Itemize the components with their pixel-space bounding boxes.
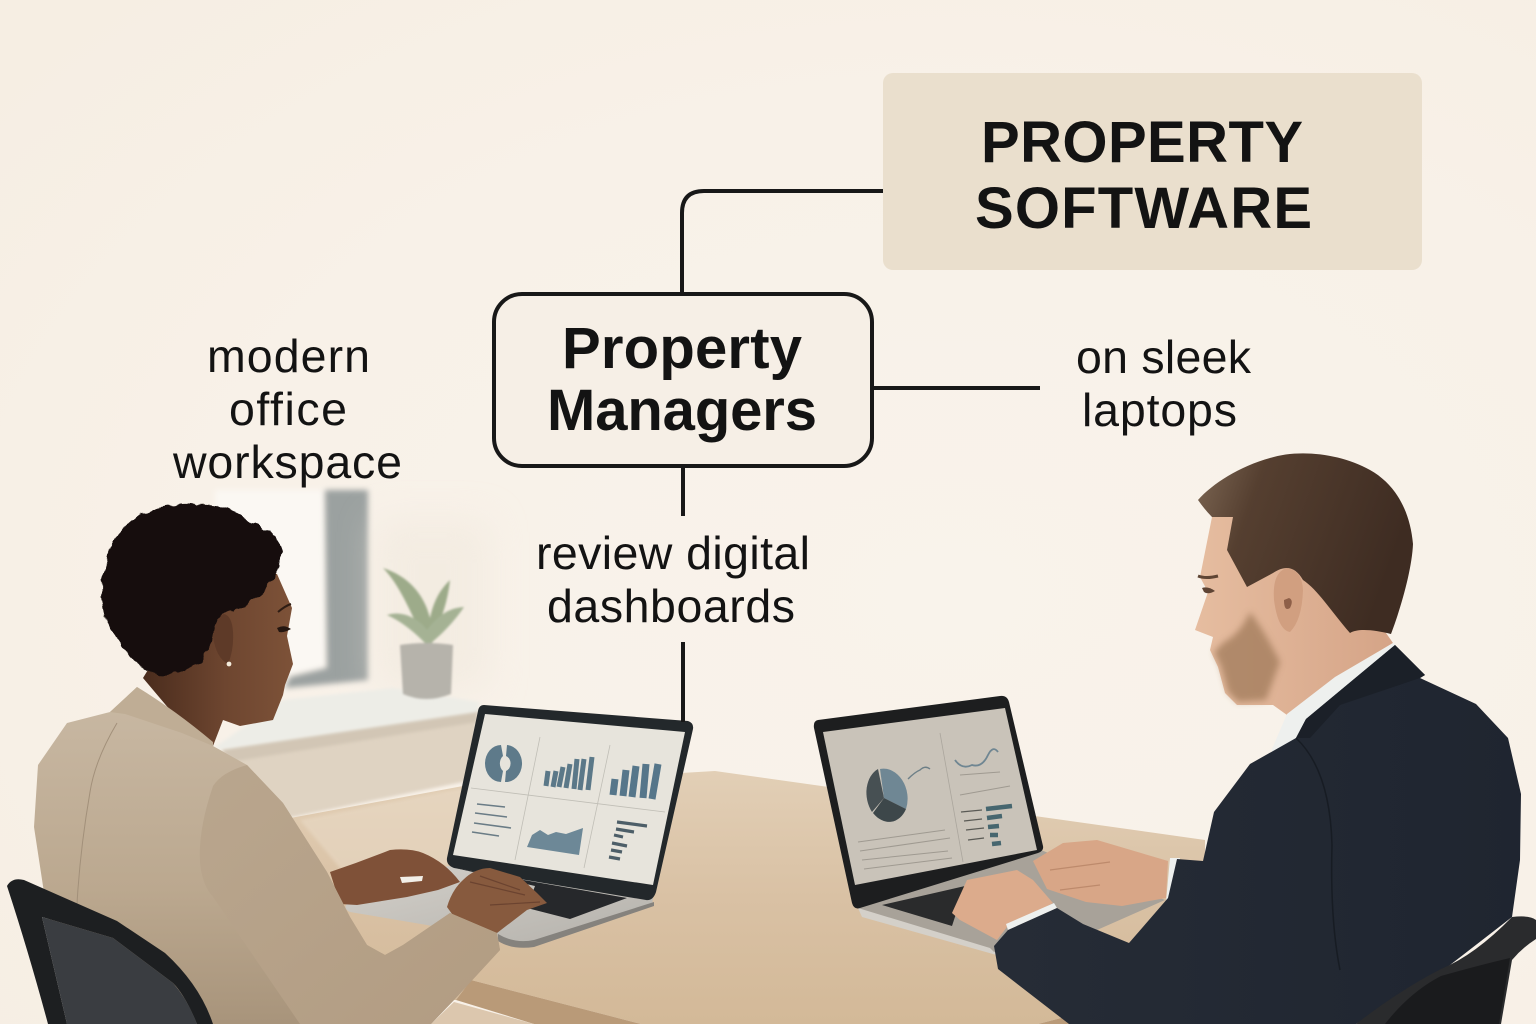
near-window table highlight: [300, 788, 480, 880]
title text: PROPERTY: [981, 110, 1303, 175]
text lines: [858, 772, 1010, 869]
wooden table: [285, 771, 1205, 1024]
shirt cuff far: [1166, 858, 1180, 902]
hand on keys: [447, 868, 547, 933]
central box: property managers: [494, 294, 872, 466]
dashboard screen: [823, 708, 1037, 885]
brow: [1198, 576, 1218, 578]
donut chart: [485, 745, 522, 782]
laptop left: [345, 705, 693, 948]
label: modern office workspace: office: [229, 383, 347, 435]
lapel: [1296, 645, 1425, 738]
hand near: [952, 870, 1053, 940]
trend line large: [955, 749, 998, 767]
central text: Property: [562, 316, 802, 381]
window frame: [285, 490, 368, 688]
pie chart: [866, 769, 908, 822]
earring: [227, 662, 231, 666]
blazer seam: [77, 723, 117, 904]
connector: dashboards to laptop: [681, 642, 685, 722]
suit jacket: [994, 645, 1521, 1024]
label: review digital dashboards: review digital: [536, 527, 810, 579]
list lines: [472, 804, 511, 836]
finger line far: [1050, 862, 1110, 890]
laptop base: [858, 850, 1165, 952]
title text: SOFTWARE: [975, 176, 1312, 241]
plant: [383, 568, 464, 699]
trend line small: [908, 767, 930, 779]
hand near laptop left: [330, 849, 460, 905]
paper glimpse: [400, 876, 423, 883]
horizontal bars: [609, 822, 647, 859]
ear: [213, 614, 233, 664]
bar chart one: [546, 757, 592, 790]
hair: [102, 503, 283, 675]
finger lines: [470, 876, 540, 905]
area chart: [527, 828, 583, 855]
beard: [1214, 612, 1280, 702]
blazer sleeve: [200, 765, 500, 1024]
table front edge left: [456, 980, 641, 1024]
woman: [34, 503, 547, 1024]
collar: [110, 687, 213, 746]
man: [952, 453, 1521, 1024]
shirt collar: [1272, 643, 1398, 752]
window pane: [215, 490, 325, 690]
wall below sill: [222, 710, 477, 817]
connector lines: [682, 191, 1040, 722]
central text: Managers: [547, 378, 817, 443]
bars: [986, 806, 1012, 844]
keyboard: [455, 868, 627, 919]
ear: [1274, 568, 1303, 632]
neck and face: [143, 560, 293, 746]
laptop lid: [447, 705, 693, 900]
dashboard screen: [453, 714, 685, 885]
man chair: [1356, 916, 1536, 1024]
wall shade near plant: [375, 520, 490, 690]
label: modern office workspace: workspace: [172, 436, 402, 488]
bar chart two: [613, 764, 658, 799]
eye: [1202, 587, 1215, 593]
eye: [277, 626, 291, 632]
label: modern office workspace: modern: [207, 330, 370, 382]
title box: property software: [883, 73, 1422, 270]
label: review digital dashboards: dashboards: [547, 580, 795, 632]
neck and face: [1195, 510, 1393, 715]
hair: [1198, 453, 1413, 634]
connector: managers to laptops: [872, 386, 1040, 390]
hand far: [1033, 840, 1168, 906]
brow: [278, 604, 291, 612]
floor: [431, 1002, 534, 1024]
connector: software to managers: [682, 191, 883, 294]
label: on sleek laptops: on sleek: [1076, 331, 1252, 383]
table top: [285, 771, 1205, 1024]
woman chair: [7, 879, 213, 1024]
window sill: [215, 688, 480, 750]
blazer body: [34, 687, 500, 1024]
window and sill scene: [215, 490, 490, 817]
label: on sleek laptops: laptops: [1082, 384, 1237, 436]
keyboard: [882, 886, 965, 926]
laptop lid: [814, 696, 1043, 908]
suit sleeve seam: [1296, 738, 1340, 970]
table front edge right: [1038, 1017, 1073, 1024]
shirt cuff near: [1006, 903, 1057, 930]
laptop right: [814, 696, 1165, 956]
connector: managers to dashboards: [681, 466, 685, 516]
laptop base: [345, 866, 653, 945]
